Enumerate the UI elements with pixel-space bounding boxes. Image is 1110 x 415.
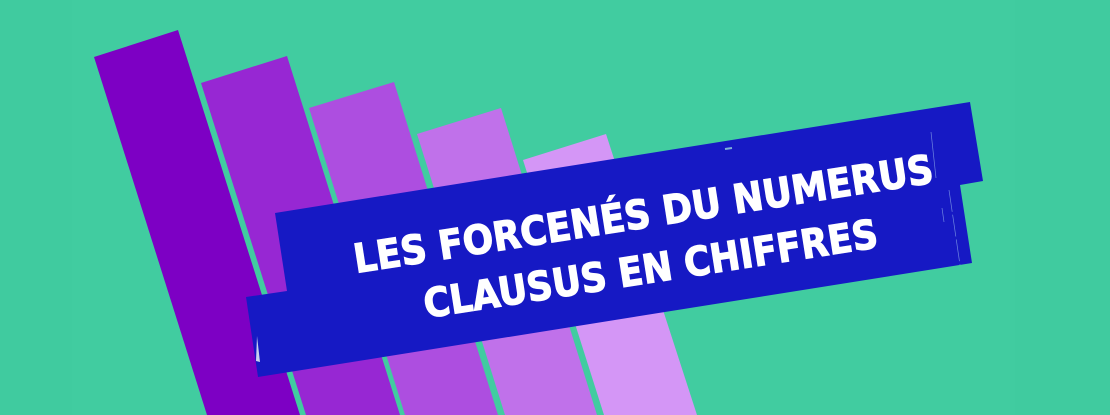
bar 3 xyxy=(309,82,498,415)
chart: five descending purple bars xyxy=(94,30,697,415)
bar 5 xyxy=(523,134,697,415)
title xyxy=(350,145,936,328)
title banner xyxy=(246,102,983,377)
title line 2: CLAUSUS EN CHIFFRES xyxy=(420,211,881,328)
banner artefacts xyxy=(725,132,960,265)
banner shape xyxy=(246,102,983,377)
bar 1 xyxy=(94,30,300,415)
bar 4 xyxy=(417,108,597,415)
title line 1: LES FORCENÉS DU NUMERUS xyxy=(350,145,936,283)
bar 2 xyxy=(201,56,400,415)
